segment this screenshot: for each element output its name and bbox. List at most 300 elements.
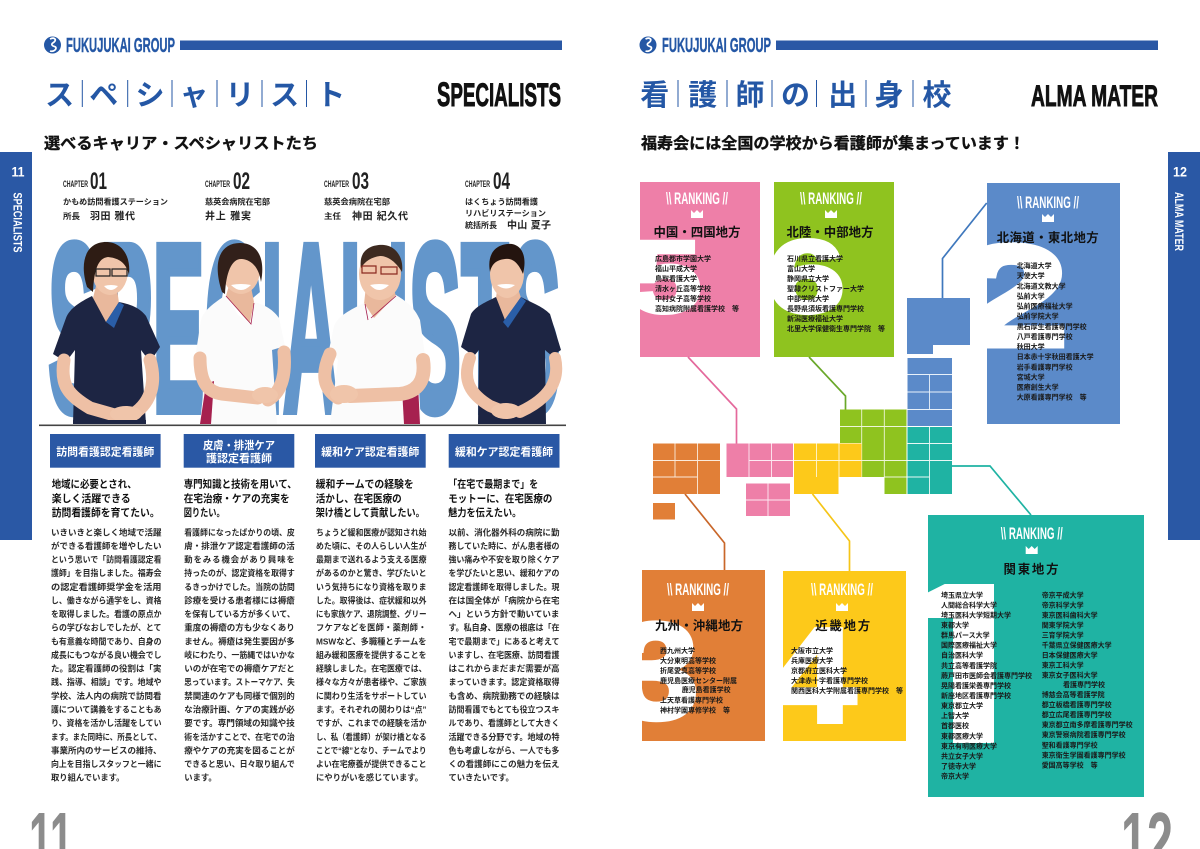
title: スペシャリスト: ト — [316, 80, 345, 112]
body text 3: MSWなど、多職種とチームを — [316, 636, 426, 646]
role label 2 — [184, 434, 294, 468]
school list: 関西医科大学附属看護専門学校 等 — [791, 686, 903, 695]
english title: SPECIALISTS: SPECIALISTS — [437, 76, 561, 114]
school list — [787, 254, 885, 333]
panel: rank 2 Hokkaido Tohoku — [987, 183, 1120, 424]
region name: 九州・沖縄地方 — [655, 618, 743, 633]
body text 2: 膚・排泄ケア認定看護師の活 — [184, 541, 296, 551]
arrow: yellow connector — [812, 494, 850, 571]
school list right — [1042, 590, 1133, 769]
body text 3: 様々な方々が患者様や、ご家族 — [316, 677, 427, 687]
headline 2: 図りたい。 — [184, 507, 225, 519]
chapter 02 heading — [205, 168, 270, 222]
body text 1: し、働きながら通学をし、資格 — [51, 596, 162, 606]
school list: 鳥取看護大学 — [655, 274, 697, 283]
body text 4: 宅で最期まで」にあると考えて — [448, 636, 560, 646]
school list left: 群馬パース大学 — [941, 631, 990, 640]
school list left: 東京都立大学 — [941, 701, 983, 710]
school list: 岩手看護専門学校 — [1017, 362, 1073, 371]
subheading right: 福寿会には全国の学校から看護師が集まっています！ — [641, 134, 1025, 152]
role label 2: 皮膚・排泄ケア — [203, 439, 275, 452]
chapter 02 heading: 井上 雅実 — [205, 210, 251, 222]
school list right: 聖和看護専門学校 — [1042, 740, 1098, 749]
body text 1: 護について講義をすることもあ — [51, 704, 162, 714]
body text 3: ことで“線”となり、チームでより — [316, 745, 426, 755]
body text 1: 学校、法人内の病院で訪問看 — [51, 691, 162, 701]
school list left — [941, 590, 1032, 780]
body text 3 — [316, 527, 427, 783]
body text 1: という思いで「訪問看護認定看 — [51, 555, 162, 565]
body text 4: くの看護師にこの魅力を伝え — [448, 759, 560, 769]
school list: 医療創生大学 — [1017, 383, 1059, 392]
body text 2: るきっかけでした。当院の訪問 — [184, 582, 295, 592]
title: 看護師の出身校: 身 — [874, 79, 904, 112]
body text 4: ルであり、看護師として大きく — [448, 718, 560, 728]
school list left: 帝京大学 — [941, 772, 969, 780]
body text 2: 重度の褥瘡の方も少なくあり — [184, 623, 295, 633]
chapter 01 heading: 所長 — [63, 211, 80, 221]
body text 4: 務していた時に、がん患者様の — [448, 541, 560, 551]
school list right: 東京都立南多摩看護専門学校 — [1042, 720, 1133, 729]
headline 1: 楽しく活躍できる — [52, 492, 131, 505]
body text 1: 護師」を目指しました。福寿会 — [51, 568, 162, 578]
body text 4: 訪問看護でもとても役立つスキ — [448, 704, 560, 714]
map: Shikoku — [746, 484, 790, 516]
title: 看護師の出身校: 校 — [922, 79, 952, 112]
body text 4: 以前、消化器外科の病院に勤 — [448, 527, 560, 537]
body text 2: ません。褥瘡は発生要因が多 — [184, 636, 295, 646]
body text 3: し、私（看護師）が架け橋となる — [316, 732, 426, 742]
body text 4: へ」という方針で動いていま — [448, 609, 560, 619]
body text 4: 活躍できる分野です。地域の特 — [448, 732, 560, 742]
chapter 01 heading: CHAPTER — [63, 179, 88, 189]
body text 1: いきいきと楽しく地域で活躍 — [51, 527, 162, 537]
school list right: 東京衛生学園看護専門学校 — [1042, 750, 1126, 759]
title: 看護師の出身校 — [640, 79, 952, 112]
panel: rank 6 Hokuriku Chubu — [767, 182, 894, 357]
school list: 福山平成大学 — [655, 264, 697, 273]
body text 3: 経験しました。在宅医療では、 — [316, 664, 426, 674]
side tab left — [0, 152, 32, 540]
school list: 大分東明高等学校 — [660, 656, 716, 665]
school list: 神村学園専修学校 等 — [660, 705, 730, 714]
body text 3: にも家族ケア、退院調整、グリー — [316, 609, 426, 619]
headline 3: 緩和チームでの経験を — [316, 478, 414, 490]
side tab right — [1168, 152, 1200, 540]
body text 4: 色も考慮しながら、一人でも多 — [448, 745, 560, 755]
body text 1: の認定看護師奨学金を活用 — [51, 582, 162, 592]
school list left: 東京有明医療大学 — [941, 741, 997, 750]
chapter 04 heading: 統括所長 — [465, 220, 497, 230]
chapter 02 heading: 02 — [233, 168, 250, 195]
school list left: 自治医科大学 — [941, 651, 983, 660]
photo: nurse 1 in navy scrubs — [53, 242, 160, 424]
school list right: 三育学院大学 — [1042, 630, 1084, 639]
chapter 01 heading: 羽田 雅代 — [90, 210, 135, 222]
body text 4: 認定看護師を取得しました。現 — [448, 582, 560, 592]
body text 3: ちょうど緩和医療が認知され始 — [316, 527, 427, 537]
article column 1 — [50, 434, 162, 783]
subheading left: 選べるキャリア・スペシャリストたち — [44, 134, 318, 152]
school list — [1017, 261, 1094, 402]
body text 2: 看護師になったばかりの頃、皮 — [184, 527, 295, 537]
body text 1: 践、指導、相談」です。地域や — [51, 677, 162, 687]
body text 4: 在は国全体が「病院から在宅 — [448, 596, 560, 606]
title: 看護師の出身校: 出 — [828, 79, 857, 112]
chapter 04 heading: 中山 夏子 — [507, 218, 551, 232]
school list: 石川県立看護大学 — [787, 254, 843, 263]
panel: rank 1 Kanto — [928, 515, 1144, 797]
body text 2: 動をみる機会があり興味を — [184, 555, 295, 565]
school list: 高知病院附属看護学校 等 — [655, 304, 739, 313]
headline 2: 在宅治療・ケアの充実を — [184, 492, 290, 505]
school list left: 人間総合科学大学 — [941, 600, 997, 609]
region name: 中国・四国地方 — [654, 224, 740, 240]
headline 1: 地域に必要とされ、 — [52, 478, 137, 490]
school list left: 国際医療福祉大学 — [941, 641, 997, 650]
map: Kyushu — [653, 444, 720, 494]
body text 3: した。取得後は、症状緩和以外 — [316, 596, 427, 606]
big numeral 3: 3 — [615, 595, 698, 747]
school list left: 共立高等看護学院 — [941, 661, 997, 670]
school list — [791, 646, 903, 695]
headline 3 — [316, 478, 425, 519]
role label 4: 緩和ケア認定看護師 — [455, 446, 553, 459]
body text 2: 思っています。ストーマケア、失 — [184, 677, 295, 687]
region name: 北陸・中部地方 — [786, 224, 874, 240]
title: 看護師の出身校: 護 — [688, 79, 717, 112]
panel: rank 5 Chugoku Shikoku — [629, 182, 760, 357]
body text 2: いのが在宅での褥瘡ケアだと — [184, 664, 295, 674]
school list left: 埼玉医科大学短期大学 — [941, 610, 1011, 620]
title: スペシャリスト — [45, 80, 345, 112]
ranking label: \\ RANKING // — [667, 580, 729, 599]
ranking label — [1001, 524, 1063, 554]
school list: 広島都市学園大学 — [655, 254, 711, 263]
group name: FUKUJUKAI GROUP — [66, 35, 175, 57]
school list left: 首都医校 — [941, 721, 969, 730]
school list: 鹿児島医療センター附属 — [660, 676, 737, 685]
ranking label — [666, 189, 728, 218]
chapter 03 heading — [324, 168, 408, 222]
role label 1: 訪問看護認定看護師 — [56, 446, 155, 459]
body text 2: 禁関連のケアも同様で個別的 — [184, 691, 295, 701]
map: Chugoku — [726, 444, 793, 477]
article column 3 — [315, 434, 427, 783]
title: スペシャリスト: ペ — [89, 80, 118, 112]
body text 1: も有意義な時間であり、自身の — [51, 636, 162, 646]
role label 1 — [50, 434, 161, 468]
chapter 01 heading — [63, 168, 168, 222]
side tab right: 12 — [1173, 164, 1187, 180]
body text 1: た。認定看護師の役割は「実 — [51, 664, 162, 674]
arrow: pink connector — [688, 357, 736, 444]
body text 3: 組み緩和医療を提供することを — [316, 650, 426, 660]
map: Hokuriku Chubu — [840, 410, 906, 494]
side tab left: SPECIALISTS — [10, 192, 24, 252]
region name: 北海道・東北地方 — [997, 230, 1099, 245]
school list: 北海道文教大学 — [1017, 281, 1066, 290]
chapter 04 heading: CHAPTER — [465, 179, 490, 189]
title: スペシャリスト: ス — [270, 80, 299, 112]
body text 3: フケアなどを医師・薬剤師・ — [316, 623, 426, 633]
side tab left: 11 — [12, 164, 25, 180]
icon: group logo right — [640, 36, 656, 54]
school list: 静岡県立大学 — [787, 274, 829, 283]
school list: 天使大学 — [1017, 271, 1045, 280]
chapter 03 heading: 慈英会病院在宅部 — [324, 197, 390, 207]
header bar — [180, 40, 562, 50]
school list right: 東京女子医科大学 — [1042, 670, 1098, 679]
title: 看護師の出身校: 看 — [640, 79, 669, 112]
ranking label: \\ RANKING // — [1017, 193, 1079, 212]
school list: 大原看護専門学校 等 — [1017, 393, 1087, 402]
arrow: teal connector — [952, 466, 1031, 515]
title: 看護師の出身校: 師 — [735, 79, 765, 112]
photo: nurse 3 in white uniform — [325, 245, 425, 424]
headline 4 — [448, 478, 552, 519]
chapter 03 heading: 03 — [352, 168, 369, 195]
school list: 北海道大学 — [1017, 261, 1052, 270]
map: Kinki — [794, 444, 862, 494]
body text 2: 診療を受ける患者様には褥瘡 — [184, 596, 296, 606]
map: Hokkaido Tohoku — [907, 298, 970, 426]
headline 4: モットーに、在宅医療の — [448, 492, 552, 505]
body text 3: ます。それぞれの関わりは“点” — [316, 704, 426, 714]
school list: 清水ヶ丘高等学校 — [655, 284, 711, 293]
body text 2: できると思い、日々取り組んで — [184, 759, 295, 769]
chapter 04 heading: リハビリステーション — [465, 208, 546, 218]
chapter 03 heading: 主任 — [324, 211, 341, 221]
region name: 関東地方 — [1004, 562, 1058, 576]
school list right: 愛国高等学校 等 — [1042, 760, 1098, 769]
body text 3: いう気持ちになり資格を取りま — [316, 582, 426, 592]
school list — [660, 646, 737, 714]
school list right: 帝京平成大学 — [1042, 590, 1084, 599]
body text 4: ていきたいです。 — [448, 773, 514, 783]
left page header: group logo and bar — [44, 35, 562, 57]
icon: group logo — [44, 36, 61, 54]
role label 3 — [315, 434, 426, 468]
school list left: 共立女子大学 — [941, 751, 983, 760]
arrow: green connector — [809, 357, 846, 410]
ranking label — [811, 580, 873, 611]
school list left: 東都大学 — [941, 620, 969, 630]
role label 2: 護認定看護師 — [206, 452, 272, 465]
photo: nurse 4 in navy scrubs — [461, 244, 561, 424]
chapter 04 heading: はくちょう訪問看護 — [465, 197, 538, 207]
big numeral 5: 5 — [629, 219, 701, 334]
arrow: orange connector — [685, 494, 724, 570]
body text 2: 岐にわたり、一筋縄ではいかな — [184, 650, 295, 660]
big numeral 1: 1 — [889, 537, 1056, 794]
ranking label: \\ RANKING // — [811, 580, 873, 599]
school list: 宮城大学 — [1017, 372, 1045, 381]
body text 4: も含め、病院勤務での経験は — [448, 691, 560, 701]
chapter 04 heading: 04 — [493, 168, 510, 195]
body text 1 — [51, 527, 162, 783]
body text 1: ます。また同時に、所長として、 — [51, 732, 162, 742]
arrow: blue connector — [942, 203, 987, 298]
body text 1: 向上を目指しスタッフと一緒に — [51, 759, 162, 769]
header bar right — [776, 40, 1158, 50]
school list left: 蕨戸田市医師会看護専門学校 — [941, 671, 1032, 680]
ranking label: \\ RANKING // — [666, 189, 728, 208]
body text 4: を学びたいと思い、緩和ケアの — [448, 568, 560, 578]
body text 3: があるのかと驚き、学びたいと — [316, 568, 426, 578]
side tab right: ALMA MATER — [1172, 192, 1186, 251]
body text 4: 強い痛みや不安を取り除くケア — [448, 555, 560, 565]
ranking label — [1017, 193, 1079, 222]
role label 3: 緩和ケア認定看護師 — [321, 446, 420, 459]
chapter 04 heading — [465, 168, 551, 232]
school list: 秋田大学 — [1017, 342, 1045, 351]
body text 1: ができる看護師を増やしたい — [51, 541, 162, 551]
school list: 富山大学 — [787, 264, 815, 273]
body text 3: ですが、これまでの経験を活か — [316, 718, 427, 728]
school list right: 看護専門学校 — [1063, 680, 1105, 689]
ranking label: \\ RANKING // — [1001, 524, 1063, 543]
body text 3: に関わり生活をサポートしてい — [316, 691, 426, 701]
school list right: 日本保健医療大学 — [1042, 650, 1098, 659]
headline 4: 魅力を伝えたい。 — [448, 506, 521, 519]
chapter 03 heading: 神田 紀久代 — [352, 210, 408, 222]
school list: 兵庫医療大学 — [791, 656, 833, 665]
school list left: 新座地区看護専門学校 — [941, 691, 1011, 700]
body text 2: 持ったのが、認定資格を取得す — [184, 568, 295, 578]
school list right: 帝京科学大学 — [1042, 600, 1084, 609]
headline 4: 「在宅で最期まで」を — [448, 478, 538, 490]
school list: 弘前大学 — [1017, 291, 1045, 300]
body text 4: す。私自身、医療の根底は「在 — [448, 623, 560, 633]
title: スペシャリスト: シ — [135, 80, 165, 112]
chapter 01 heading: 01 — [90, 168, 107, 195]
school list: 鹿児島看護学校 — [682, 685, 731, 694]
school list: 京都府立医科大学 — [791, 666, 847, 675]
chapter 03 heading: CHAPTER — [324, 179, 349, 189]
group name right: FUKUJUKAI GROUP — [662, 35, 771, 57]
school list: 聖隷クリストファー大学 — [787, 284, 864, 293]
region name: 近畿地方 — [815, 618, 870, 633]
body text 3: 最期まで送れるよう支える医療 — [316, 555, 427, 565]
title: スペシャリスト: リ — [225, 80, 255, 112]
body text 3: めた頃に、その人らしい人生が — [316, 541, 427, 551]
photo: nurse 2 in white uniform — [196, 243, 285, 424]
chapter 01 heading: かもめ訪問看護ステーション — [63, 197, 168, 207]
body text 1: り、資格を活かし活躍をしてい — [51, 718, 162, 728]
body text 2: 療やケアの充実を図ることが — [184, 745, 296, 755]
body text 1: 成長にもつながる良い機会でし — [51, 650, 162, 660]
school list: 上天草看護専門学校 — [660, 695, 723, 704]
headline 3: 活かし、在宅医療の — [316, 492, 402, 505]
school list: 北里大学保健衛生専門学院 等 — [787, 324, 885, 333]
school list right: 東京工科大学 — [1042, 660, 1084, 669]
map of Japan by region — [653, 298, 970, 520]
school list: 折尾愛真高等学校 — [660, 666, 716, 675]
map: Kanto — [908, 427, 952, 494]
school list: 日本赤十字秋田看護大学 — [1017, 352, 1094, 361]
ranking label: \\ RANKING // — [800, 189, 862, 208]
school list: 西九州大学 — [660, 646, 695, 655]
school list: 新潟医療福祉大学 — [787, 314, 843, 323]
article column 2 — [184, 434, 297, 783]
school list: 黒石厚生看護専門学校 — [1017, 322, 1087, 331]
big numeral 2: 2 — [956, 216, 1067, 375]
ranking label — [800, 189, 862, 218]
body text 4 — [448, 527, 560, 783]
body text 3: にやりがいを感じています。 — [316, 773, 423, 783]
school list left: 上智大学 — [941, 711, 969, 720]
role label 4 — [449, 434, 560, 468]
body text 1: を取得しました。看護の原点か — [51, 609, 162, 619]
title: 看護師の出身校: の — [781, 80, 810, 112]
school list: 大津赤十字看護専門学校 — [791, 676, 868, 685]
chapter 02 heading: 慈英会病院在宅部 — [205, 197, 270, 207]
body text 2: 術を活かすことで、在宅での治 — [184, 732, 295, 742]
right page header: group logo and bar — [640, 35, 1158, 57]
body text 4: はこれからまだまだ需要が高 — [448, 664, 560, 674]
body text 2: います。 — [184, 773, 217, 783]
school list right: 千葉県立保健医療大学 — [1042, 640, 1112, 649]
ranking label — [667, 580, 729, 611]
chapter 02 heading: CHAPTER — [205, 179, 230, 189]
headline 1 — [52, 478, 160, 519]
body text 1: 取り組んでいます。 — [51, 773, 124, 783]
school list left: 東都医療大学 — [941, 731, 983, 740]
baseline rule under photos — [39, 424, 566, 426]
school list — [655, 254, 739, 313]
headline 2: 専門知識と技術を用いて、 — [184, 478, 297, 490]
article column 4 — [448, 434, 560, 783]
body text 1: 事業所内のサービスの維持、 — [51, 745, 162, 755]
school list: 中村女子高等学校 — [655, 294, 711, 303]
title: スペシャリスト: ャ — [179, 80, 209, 112]
school list right: 都立板橋看護専門学校 — [1042, 700, 1112, 709]
school list right: 東京警察病院看護専門学校 — [1042, 730, 1126, 739]
school list: 弘前医療福祉大学 — [1017, 302, 1073, 310]
panel: rank 3 Kyushu Okinawa — [642, 570, 765, 741]
school list right: 関東学院大学 — [1042, 620, 1084, 629]
headline 2 — [184, 478, 297, 519]
school list left: 埼玉県立大学 — [941, 590, 983, 599]
body text 3: よい在宅療養が提供できること — [316, 759, 426, 769]
school list: 中部学院大学 — [787, 294, 829, 303]
body text 1: らの学びなおしでしたが、とて — [51, 623, 162, 633]
school list left: 晃陽看護栄養専門学校 — [941, 681, 1011, 690]
big numeral 4: 4 — [767, 601, 856, 751]
panel: rank 4 Kinki — [783, 571, 906, 741]
school list right: 東京医科歯科大学 — [1042, 610, 1098, 619]
school list right: 都立広尾看護専門学校 — [1042, 710, 1112, 719]
school list: 大阪市立大学 — [791, 646, 833, 655]
title: スペシャリスト: ス — [45, 80, 74, 112]
headline 3: 架け橋として貢献したい。 — [316, 506, 425, 519]
school list right: 博慈会高等看護学院 — [1042, 690, 1105, 699]
school list: 弘前学院大学 — [1017, 312, 1059, 321]
body text 2: を保有している方が多くいて、 — [184, 609, 295, 619]
body text 2 — [184, 527, 296, 783]
school list: 長野県須坂看護専門学校 — [787, 304, 864, 313]
body text 4: いますし、在宅医療、訪問看護 — [448, 650, 560, 660]
headline 1: 訪問看護師を育てたい。 — [52, 506, 160, 519]
school list left: 了徳寺大学 — [941, 762, 976, 770]
body text 4: まっていきます。認定資格取得 — [448, 677, 560, 687]
big numeral 6: 6 — [767, 220, 845, 335]
school list: 八戸看護専門学校 — [1017, 332, 1073, 341]
body text 2: な治療計画、ケアの実践が必 — [184, 704, 296, 714]
body text 2: 要です。専門領域の知識や技 — [184, 718, 296, 728]
map: Okinawa — [653, 503, 675, 520]
